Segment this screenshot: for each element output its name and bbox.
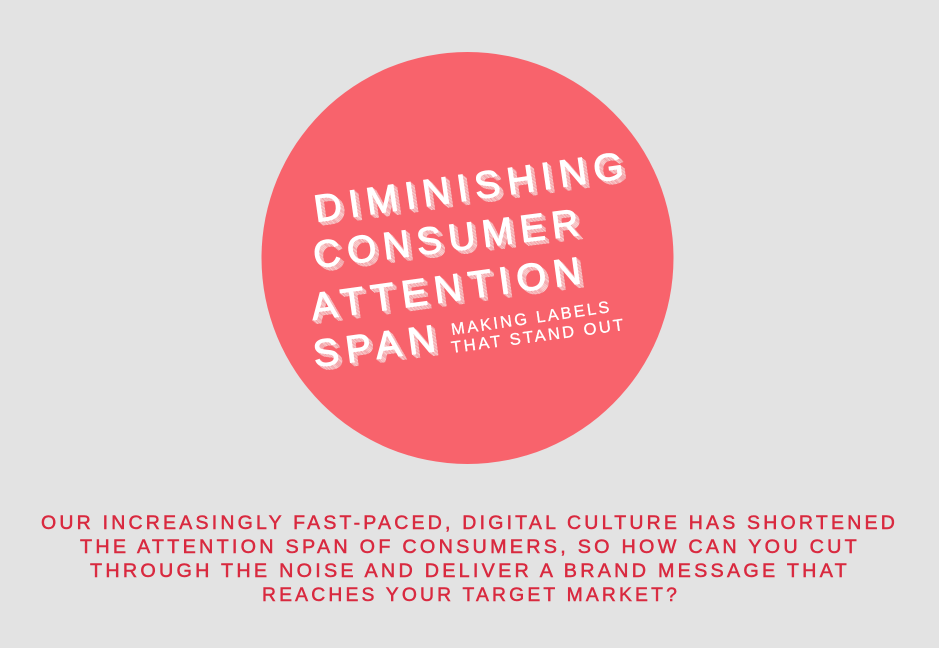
- title line: DIMINISHING: DIMINISHING: [313, 146, 635, 233]
- title line: CONSUMER: CONSUMER: [315, 205, 592, 280]
- title line: CONSUMER: CONSUMER: [312, 202, 589, 278]
- body text: THE ATTENTION SPAN OF CONSUMERS, SO HOW CAN YOU CUT: [80, 536, 860, 558]
- title line: SPAN: SPAN: [314, 320, 448, 379]
- title line: DIMINISHING: DIMINISHING: [312, 145, 634, 232]
- title line: CONSUMER: CONSUMER: [314, 204, 591, 280]
- title line: CONSUMER: CONSUMER: [311, 201, 588, 277]
- title: diminishing consumer attention span: [309, 144, 637, 379]
- body text: OUR INCREASINGLY FAST-PACED, DIGITAL CULTURE HAS SHORTENED: [41, 512, 898, 534]
- title line: ATTENTION: ATTENTION: [310, 250, 592, 330]
- title line: ATTENTION: ATTENTION: [313, 253, 595, 332]
- red circle panel: [262, 52, 674, 464]
- title line: DIMINISHING: DIMINISHING: [311, 144, 633, 231]
- body text: [41, 512, 898, 606]
- body text: REACHES YOUR TARGET MARKET?: [262, 584, 680, 606]
- subtitle: making labels that stand out: MAKING LABELS: [450, 298, 613, 339]
- body text: THROUGH THE NOISE AND DELIVER A BRAND MESSAGE THAT: [90, 560, 850, 582]
- title line: SPAN: SPAN: [313, 319, 447, 378]
- title line: SPAN: SPAN: [312, 318, 446, 377]
- subtitle: making labels that stand out: [450, 298, 627, 357]
- subtitle: making labels that stand out: THAT STAND OUT: [450, 316, 627, 357]
- title line: ATTENTION: ATTENTION: [309, 249, 591, 329]
- title line: ATTENTION: ATTENTION: [311, 251, 593, 331]
- title line: CONSUMER: CONSUMER: [313, 203, 590, 279]
- title line: SPAN: SPAN: [315, 321, 449, 379]
- title line: ATTENTION: ATTENTION: [312, 252, 594, 332]
- title line: DIMINISHING: DIMINISHING: [314, 147, 636, 234]
- title line: SPAN: SPAN: [311, 317, 445, 376]
- title line: DIMINISHING: DIMINISHING: [315, 148, 637, 234]
